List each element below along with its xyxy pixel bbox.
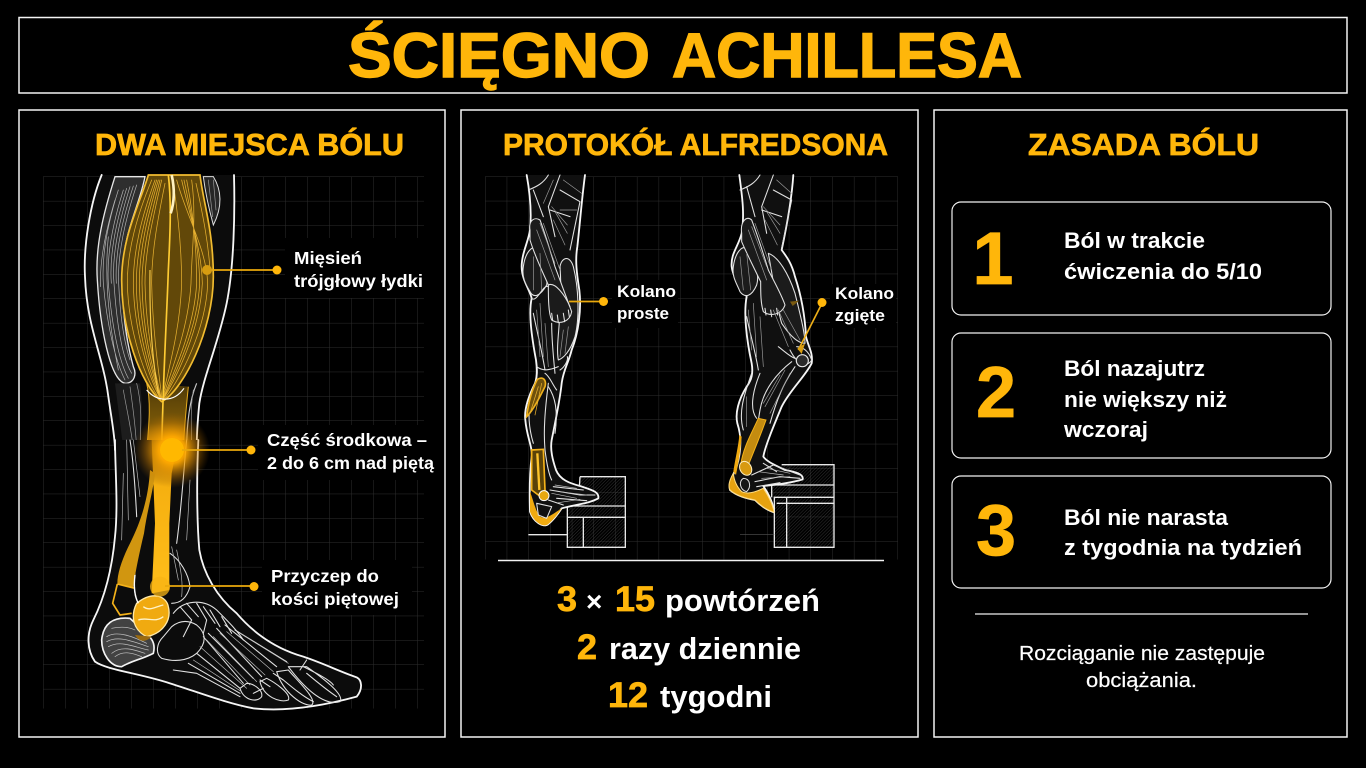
- card: rule 1: ćwiczenia do 5/10: [1064, 259, 1262, 284]
- callout: straight knee: Kolano: [617, 282, 676, 301]
- note on stretching: [1019, 643, 1265, 692]
- callout: mid-portion: Część środkowa –: [267, 430, 427, 450]
- callout: triceps surae: [202, 248, 423, 291]
- card: rule 3: z tygodnia na tydzień: [1064, 535, 1302, 560]
- callout: bent knee: zgięte: [835, 306, 885, 325]
- callout: straight knee: proste: [617, 304, 669, 323]
- heading: two pain sites: DWA MIEJSCA BÓLU: [95, 126, 404, 162]
- note on stretching: obciążania.: [1086, 670, 1197, 692]
- protocol line: sets and reps: powtórzeń: [665, 583, 820, 618]
- protocol line: duration: [608, 676, 772, 715]
- card: rule 2: Ból nazajutrz: [1064, 356, 1205, 381]
- callout: calcaneal insertion: kości piętowej: [271, 589, 399, 609]
- heading: Alfredson protocol: PROTOKÓŁ ALFREDSONA: [503, 126, 888, 162]
- illustration: bent knee figure on step: [729, 175, 834, 547]
- protocol line: frequency: 2: [577, 628, 597, 667]
- title: [348, 21, 1022, 91]
- card: rule 1: Ból w trakcie: [1064, 228, 1205, 253]
- title: ACHILLESA: [672, 21, 1022, 91]
- card: rule 2: [952, 333, 1331, 458]
- marker: mid-portion glow: [134, 412, 210, 488]
- protocol line: sets and reps: [557, 580, 820, 619]
- exercise grid background: [485, 176, 898, 560]
- callout: bent knee: Kolano: [835, 284, 894, 303]
- note on stretching: Rozciąganie nie zastępuje: [1019, 643, 1265, 665]
- tendon highlighted: [113, 440, 178, 641]
- protocol line: sets and reps: 15: [615, 580, 655, 619]
- callout: bent knee: [818, 284, 894, 325]
- callout: mid-portion: 2 do 6 cm nad piętą: [267, 453, 434, 473]
- card: rule 3: 3: [976, 491, 1016, 571]
- protocol line: frequency: razy dziennie: [609, 631, 801, 666]
- card: rule 2: 2: [976, 353, 1016, 433]
- card: rule 1: [952, 202, 1331, 315]
- panel: pain rule: [934, 110, 1347, 737]
- panel: Alfredson protocol: [461, 110, 918, 737]
- heading: pain rule: ZASADA BÓLU: [1028, 126, 1259, 162]
- illustration: straight knee figure on step: [522, 175, 625, 547]
- step: [528, 477, 625, 547]
- card: rule 2: wczoraj: [1063, 417, 1148, 442]
- protocol line: sets and reps: ×: [586, 586, 602, 617]
- protocol line: duration: 12: [608, 676, 648, 715]
- foot bones: [102, 440, 341, 705]
- card: rule 3: Ból nie narasta: [1064, 505, 1229, 530]
- callout: calcaneal insertion: [165, 566, 399, 609]
- callout: mid-portion: [182, 430, 434, 473]
- illustration: lower leg calf: [85, 175, 234, 450]
- card: rule 1: 1: [972, 217, 1014, 300]
- title: ŚCIĘGNO: [348, 21, 650, 91]
- callout: straight knee: [569, 282, 676, 323]
- step: [740, 465, 834, 547]
- protocol line: sets and reps: 3: [557, 580, 577, 619]
- callout: triceps surae: Mięsień: [294, 248, 362, 268]
- card: rule 2: nie większy niż: [1064, 387, 1227, 412]
- callout: calcaneal insertion: Przyczep do: [271, 566, 379, 586]
- protocol line: duration: tygodni: [660, 679, 772, 714]
- title banner: [19, 18, 1347, 93]
- anatomical grid background: [43, 176, 424, 708]
- panel: two pain sites: [19, 110, 445, 737]
- callout: triceps surae: trójgłowy łydki: [294, 271, 423, 291]
- illustration: ankle and foot: [89, 440, 361, 709]
- card: rule 3: [952, 476, 1331, 588]
